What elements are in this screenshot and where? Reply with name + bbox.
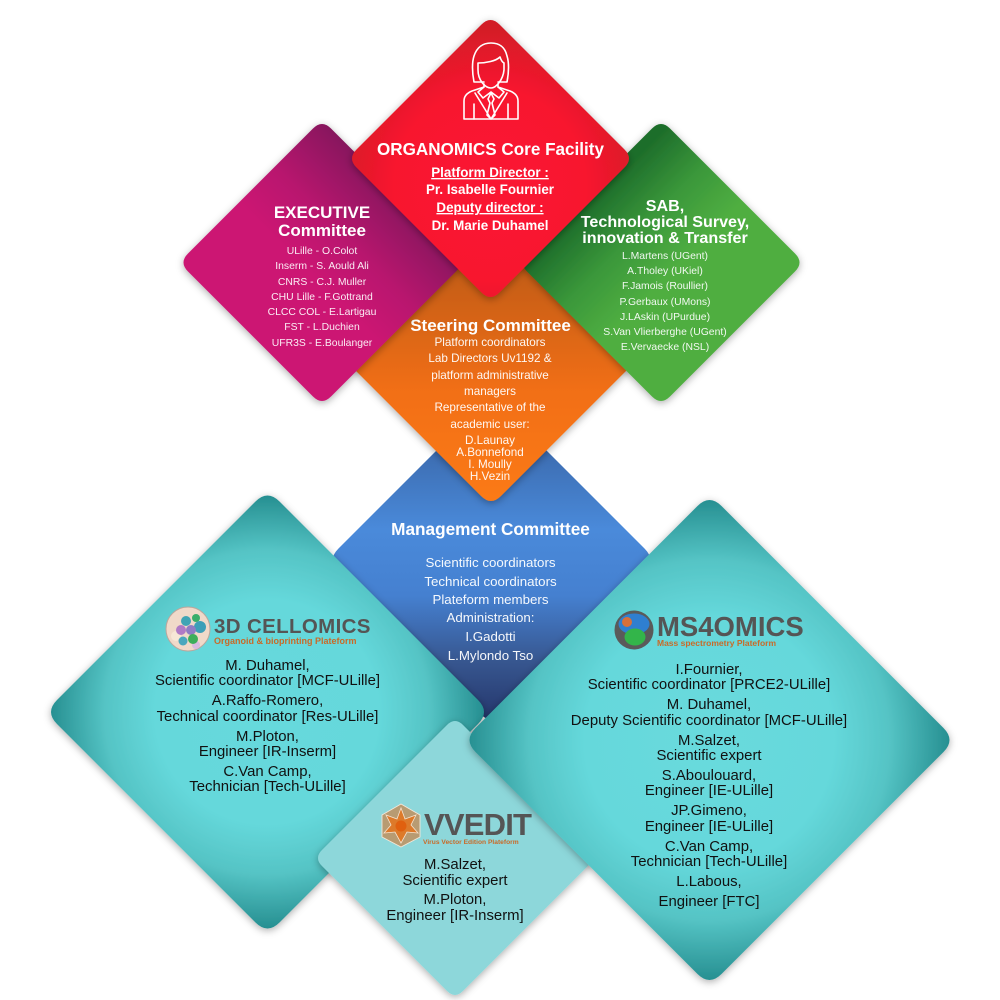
text: MS4OMICS team: Engineer [FTC]	[659, 894, 759, 910]
text: SAB members: S.Van Vlierberghe (UGent)	[603, 327, 727, 338]
text: steering members: academic user:	[450, 418, 530, 431]
text: MS4OMICS team: Technician [Tech-ULille]	[631, 854, 787, 870]
text: VVEDIT team: Scientific expert	[402, 873, 508, 889]
text: steering members: D.Launay	[465, 434, 515, 447]
panel: steering committee	[350, 219, 632, 501]
text: steering members: Platform coordinators	[434, 336, 546, 349]
text: MS4OMICS team: Engineer [IE-ULille]	[645, 783, 773, 799]
text: VVEDIT team: M.Salzet,	[424, 857, 486, 873]
text: executive members: CNRS - C.J. Muller	[278, 277, 367, 288]
diamond: management	[332, 402, 650, 720]
text: MS4OMICS team: Scientific expert	[656, 748, 762, 764]
logo subtitle: MS4OMICS: Mass spectrometry Plateform	[657, 638, 776, 648]
panel: 3D cellomics	[51, 496, 484, 928]
heading: core facility: ORGANOMICS Core Facility	[377, 140, 604, 159]
text: SAB members: P.Gerbaux (UMons)	[619, 297, 711, 308]
text: 3D cellomics team	[155, 658, 380, 795]
text: management members: Scientific coordinators	[425, 555, 556, 570]
logo subtitle: VVEDIT: Virus Vector Edition Plateform	[423, 839, 519, 846]
text: directors	[426, 165, 555, 233]
text: steering members: A.Bonnefond	[456, 446, 524, 459]
text: VVEDIT team: M.Ploton,	[424, 892, 486, 908]
diamond: steering	[350, 219, 632, 501]
heading: executive committee: EXECUTIVE	[274, 203, 370, 222]
text: steering members: Lab Directors Uv1192 &	[428, 352, 552, 365]
text: 3D cellomics team: Technical coordinator [Res-ULille]	[157, 709, 378, 725]
text: steering members: platform administrative	[431, 369, 549, 382]
text: MS4OMICS team: I.Fournier,	[675, 662, 743, 678]
diamond: SAB	[522, 124, 800, 401]
diamond: 3D cellomics	[51, 496, 484, 928]
text: directors: Dr. Marie Duhamel	[432, 218, 548, 233]
text: SAB members: E.Vervaecke (NSL)	[621, 342, 709, 353]
text: MS4OMICS team: JP.Gimeno,	[671, 803, 747, 819]
text: directors: Platform Director :	[431, 165, 549, 180]
text: SAB members	[603, 251, 727, 353]
diamond: core facility	[352, 20, 629, 297]
panel: MS4OMICS	[470, 500, 950, 980]
text: executive members: CHU Lille - F.Gottrand	[271, 292, 373, 303]
text: SAB members: A.Tholey (UKiel)	[627, 266, 703, 277]
text: MS4OMICS team: M.Salzet,	[678, 733, 740, 749]
icon: MS4OMICS brain logo	[614, 610, 654, 650]
icon: director person	[464, 43, 518, 119]
logo text: MS4OMICS: MS4OMICS	[657, 611, 804, 642]
panel: management committee	[332, 402, 650, 720]
text: 3D cellomics team: A.Raffo-Romero,	[212, 693, 323, 709]
text: MS4OMICS team: Scientific coordinator [PRCE2-ULille]	[588, 677, 830, 693]
heading: SAB: SAB,	[646, 197, 684, 215]
text: MS4OMICS team: S.Aboulouard,	[662, 768, 756, 784]
logo text: 3D cellomics: 3D CELLOMICS	[214, 615, 371, 638]
text: executive members: CLCC COL - E.Lartigau	[268, 307, 377, 318]
text: steering members: H.Vezin	[470, 470, 510, 483]
panel: executive committee	[184, 124, 460, 401]
text: management members: L.Mylondo Tso	[448, 648, 533, 663]
diamond: executive	[184, 124, 460, 401]
text: management members	[424, 555, 557, 663]
text: SAB members: L.Martens (UGent)	[622, 251, 708, 262]
text: directors: Deputy director :	[436, 200, 544, 215]
text: 3D cellomics team: M.Ploton,	[236, 729, 299, 745]
text: 3D cellomics team: Technician [Tech-ULille]	[189, 779, 346, 795]
text: MS4OMICS team: M. Duhamel,	[667, 697, 751, 713]
text: steering members: I. Moully	[468, 458, 512, 471]
text: VVEDIT team	[386, 857, 524, 924]
text: MS4OMICS team: Engineer [IE-ULille]	[645, 819, 773, 835]
text: management members: I.Gadotti	[465, 629, 516, 644]
text: steering members: managers	[464, 385, 516, 398]
heading: executive committee: Committee	[278, 221, 366, 240]
text: MS4OMICS team: L.Labous,	[676, 874, 742, 890]
text: MS4OMICS team: C.Van Camp,	[665, 839, 753, 855]
text: management members: Technical coordinators	[424, 574, 557, 589]
heading: management committee: Management Committee	[391, 519, 590, 539]
text: executive members: ULille - O.Colot	[287, 246, 357, 257]
text: executive members: FST - L.Duchien	[284, 322, 360, 333]
text: 3D cellomics team: M. Duhamel,	[225, 658, 310, 674]
text: SAB members: F.Jamois (Roullier)	[622, 281, 708, 292]
text: 3D cellomics team: Scientific coordinator [MCF-ULille]	[155, 673, 380, 689]
text: VVEDIT team: Engineer [IR-Inserm]	[386, 908, 524, 924]
text: management members: Administration:	[447, 610, 534, 625]
panel: core facility	[352, 20, 629, 297]
text: 3D cellomics team: C.Van Camp,	[223, 764, 312, 780]
text: executive members	[268, 246, 377, 349]
text: steering members: Representative of the	[434, 401, 546, 414]
icon: VVEDIT hexagon logo	[382, 804, 420, 847]
heading: SAB: Technological Survey,	[581, 213, 749, 231]
panel: SAB	[522, 124, 800, 401]
text: MS4OMICS team	[571, 662, 847, 910]
diamond: VVEDIT	[318, 721, 592, 995]
text: executive members: UFR3S - E.Boulanger	[272, 338, 373, 349]
text: management members: Plateform members	[432, 592, 549, 607]
text: executive members: Inserm - S. Aould Ali	[275, 261, 369, 272]
logo text: VVEDIT: VVEDIT	[424, 807, 532, 842]
icon: organoid logo	[166, 607, 210, 651]
text: MS4OMICS team: Deputy Scientific coordinator [MCF-ULille]	[571, 713, 847, 729]
logo subtitle: 3D cellomics: Organoid & bioprinting Plateform	[214, 636, 356, 646]
text: steering members	[428, 336, 552, 483]
heading: steering committee: Steering Committee	[410, 316, 571, 335]
panel: VVEDIT	[318, 721, 592, 995]
heading: SAB: innovation & Transfer	[582, 229, 748, 247]
text: directors: Pr. Isabelle Fournier	[426, 182, 555, 197]
text: 3D cellomics team: Engineer [IR-Inserm]	[199, 744, 336, 760]
diamond: MS4OMICS	[470, 500, 950, 980]
text: SAB members: J.LAskin (UPurdue)	[620, 312, 710, 323]
